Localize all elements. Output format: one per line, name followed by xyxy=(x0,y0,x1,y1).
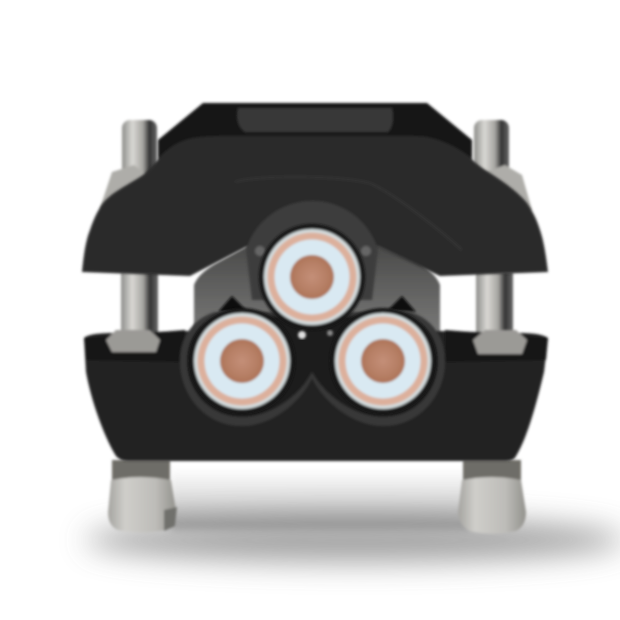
lower clamp top ledge left xyxy=(84,330,185,362)
cable: top xyxy=(259,224,365,330)
cable: bottom left xyxy=(189,308,295,414)
central collar around top cable xyxy=(246,201,378,300)
floor shadow xyxy=(85,468,620,562)
lower clamp body xyxy=(84,312,548,461)
left foot nut xyxy=(108,460,177,532)
upper left bolt xyxy=(100,120,157,215)
lower right bolt shaft xyxy=(476,272,513,338)
upper clamp rear ridge xyxy=(158,103,472,175)
centre rivets xyxy=(298,330,333,339)
lower left hex nut xyxy=(106,330,160,352)
lower right hex nut xyxy=(473,330,527,354)
lower left bolt shaft xyxy=(121,272,158,338)
collar bolts xyxy=(255,246,265,256)
central grey insert xyxy=(194,245,440,340)
lower clamp top ledge right xyxy=(445,330,548,362)
lower cable pockets xyxy=(180,312,445,426)
front face highlight ridge xyxy=(235,177,462,250)
rear ridge embossed panel xyxy=(237,108,393,132)
cable: bottom right xyxy=(330,308,436,414)
upper clamp body xyxy=(82,103,548,300)
upper right bolt xyxy=(474,120,532,215)
insert dark notches xyxy=(218,296,416,312)
right foot nut xyxy=(458,460,526,534)
upper clamp front face xyxy=(82,136,548,276)
